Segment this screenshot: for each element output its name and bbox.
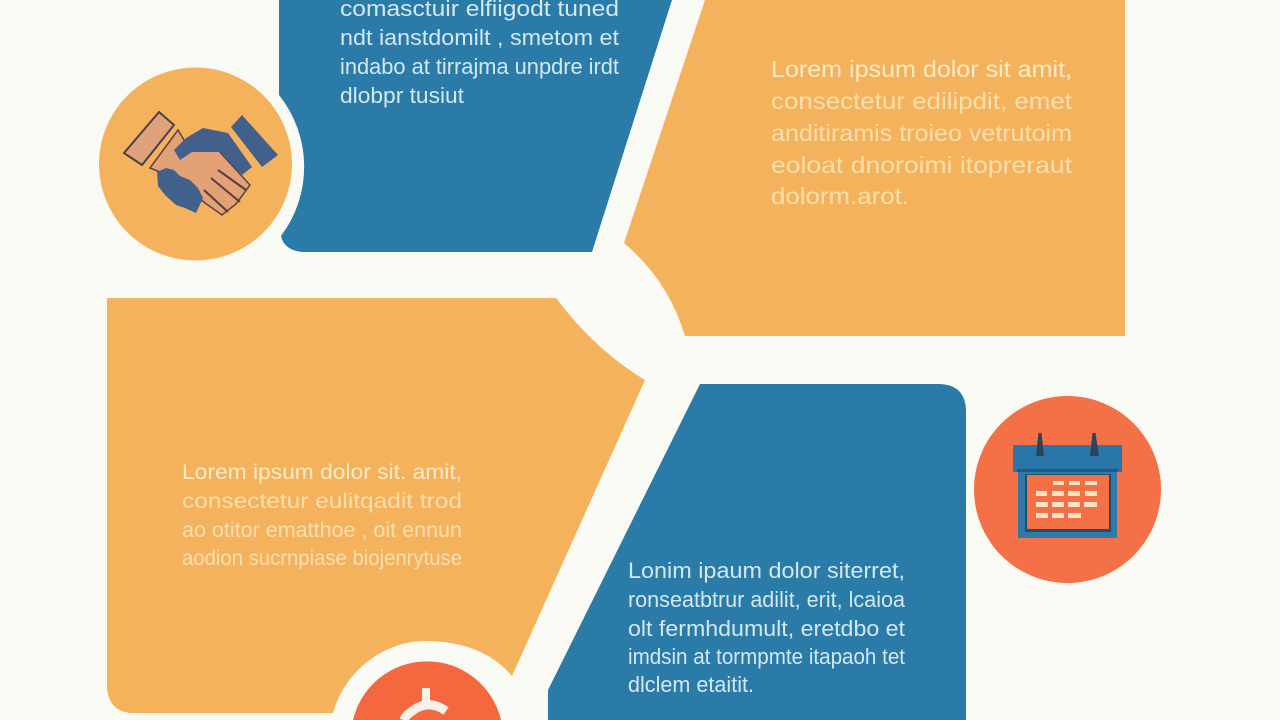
text block: bottom-right blue — [628, 558, 906, 697]
panel shape: bottom-right blue — [548, 384, 966, 720]
icon: handshake badge — [99, 68, 292, 260]
calendar body — [1018, 468, 1117, 538]
panel: bottom-right blue — [548, 384, 966, 720]
navy lower hand — [157, 168, 203, 213]
text block: bottom-right blue: dlclem etaitit. — [628, 672, 754, 697]
panel: top-right orange — [624, 0, 1125, 336]
text block: top-left blue: indabo at tirrajma unpdre irdt — [340, 54, 619, 79]
text block: top-right orange: anditiramis troieo vetrutoim — [771, 120, 1072, 146]
text block: bottom-right blue: imdsin at tormpmte itapaoh tet — [628, 644, 905, 669]
calendar date cells — [1036, 481, 1097, 518]
text block: top-left blue: dlobpr tusiut — [340, 83, 464, 108]
left cuff — [124, 112, 174, 165]
text block: bottom-left orange: Lorem ipsum dolor sit. amit, — [182, 460, 462, 484]
panel shape: bottom-left orange — [107, 298, 645, 713]
calendar rings — [1036, 433, 1099, 456]
right cuff — [231, 115, 278, 167]
text block: bottom-left orange: aodion sucrnpiase biojenrytuse — [182, 546, 462, 570]
text block: top-right orange: dolorm.arot. — [771, 183, 909, 209]
text block: bottom-right blue: olt fermhdumult, eretdbo et — [628, 616, 905, 641]
finger lines — [204, 170, 246, 212]
text block: top-left blue: ndt ianstdomilt , smetom et — [340, 25, 619, 50]
text block: bottom-right blue: ronseatbtrur adilit, erit, lcaioa — [628, 587, 906, 612]
text block: top-right orange: eoloat dnoroimi itopreraut — [771, 152, 1073, 178]
panel: bottom-left orange — [107, 298, 645, 713]
icon: calendar badge — [974, 396, 1161, 583]
calendar header — [1013, 445, 1122, 472]
text block: bottom-right blue: Lonim ipaum dolor siterret, — [628, 558, 905, 583]
text block: top-left blue — [340, 0, 619, 108]
text block: bottom-left orange — [182, 460, 462, 570]
panel shape: top-right orange — [624, 0, 1125, 336]
skin hand — [150, 130, 250, 215]
text block: top-right orange: Lorem ipsum dolor sit amit, — [771, 56, 1072, 82]
text block: top-right orange — [771, 56, 1073, 209]
text block: bottom-left orange: ao otitor ematthoe , oit ennun — [182, 518, 462, 542]
panel shape: top-left blue — [279, 0, 672, 252]
panel: top-left blue — [279, 0, 672, 252]
text block: top-right orange: consectetur edilipdit, emet — [771, 88, 1073, 114]
text block: bottom-left orange: consectetur eulitqadit trod — [182, 489, 462, 513]
icon: dollar badge — [353, 661, 501, 720]
navy upper hand — [174, 128, 252, 175]
